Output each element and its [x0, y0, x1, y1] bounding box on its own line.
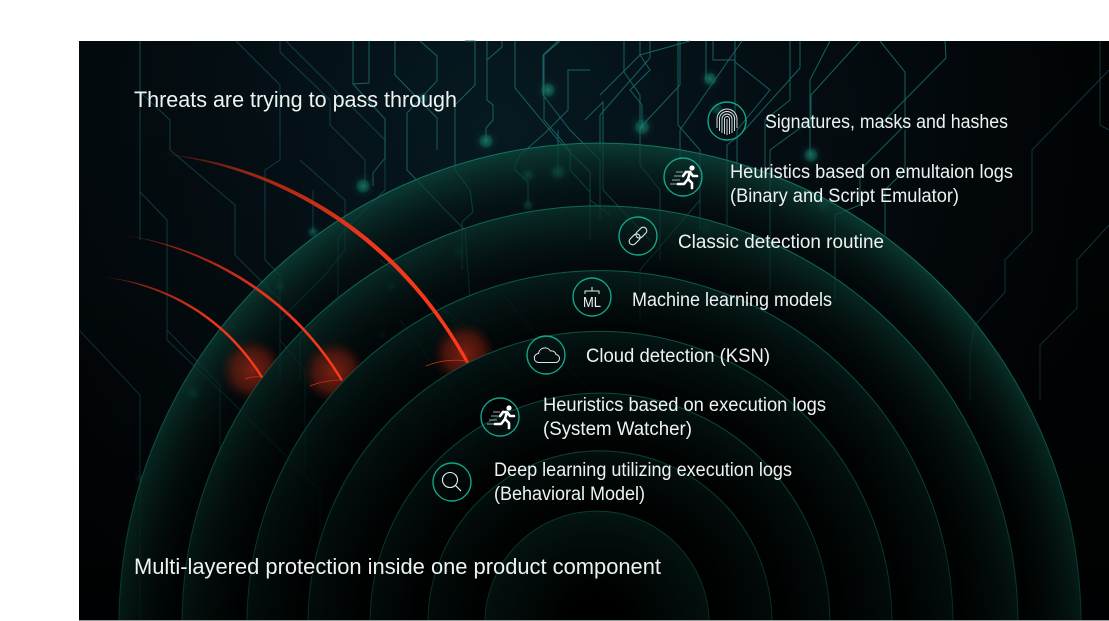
icon: chain link [619, 217, 657, 255]
heading: protection: Multi-layered protection inside one product component [134, 554, 661, 579]
icon: fingerprint [708, 102, 746, 140]
icon: machine learning: ML [583, 294, 601, 311]
heading: threats: Threats are trying to pass through [134, 87, 457, 112]
text: system watcher: (System Watcher) [543, 419, 692, 440]
text: system watcher: Heuristics based on execution logs [543, 395, 826, 416]
icon: machine learning [573, 278, 611, 316]
text: classic routine: Classic detection routine [678, 232, 884, 253]
icon: running figure (system watcher) [481, 398, 519, 436]
text: behavioral model [494, 460, 792, 505]
text: behavioral model: Deep learning utilizing execution logs [494, 460, 792, 481]
text: behavioral model: (Behavioral Model) [494, 484, 645, 505]
text: emulation heuristics: Heuristics based on emultaion logs [730, 162, 1013, 183]
circuit nodes [132, 67, 834, 486]
text: signatures: Signatures, masks and hashes [765, 112, 1008, 133]
icon: cloud [527, 336, 565, 374]
text: machine learning: Machine learning models [632, 290, 832, 311]
text: emulation heuristics [730, 162, 1013, 207]
icon: magnifier [433, 463, 471, 501]
text: system watcher [543, 395, 826, 440]
threat impact glows [220, 322, 496, 404]
icon: running figure (emulator) [664, 158, 702, 196]
text: cloud detection: Cloud detection (KSN) [586, 346, 770, 367]
threat arcs [97, 153, 469, 386]
text: emulation heuristics: (Binary and Script Emulator) [730, 186, 959, 207]
